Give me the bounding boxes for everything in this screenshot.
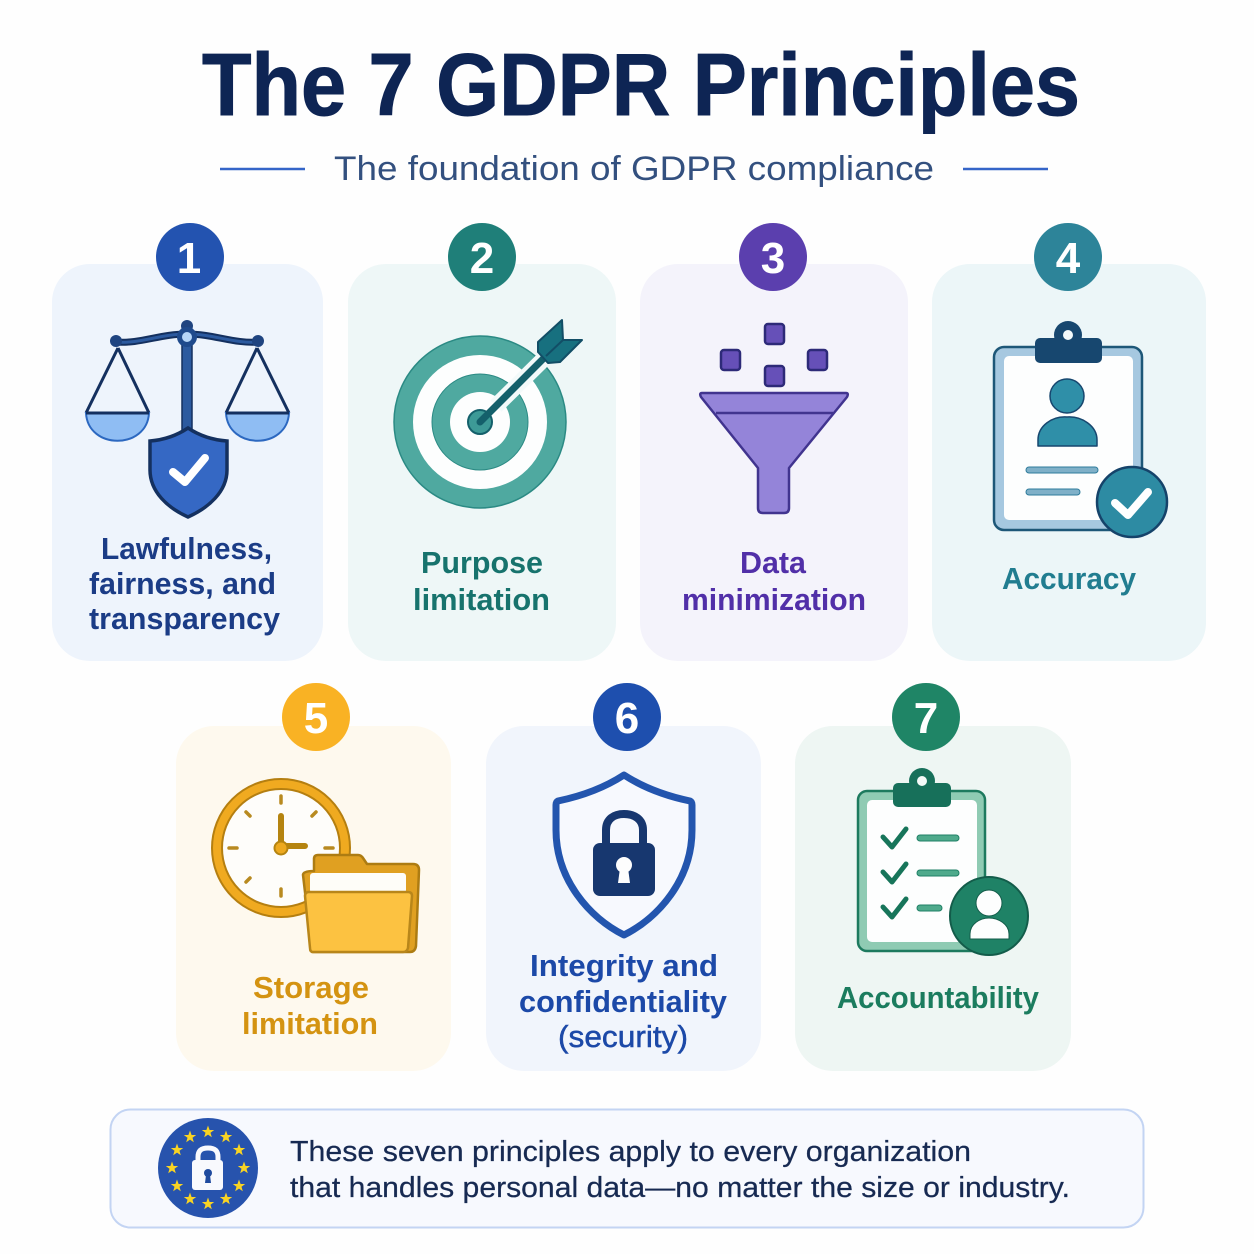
label: Purpose (421, 545, 543, 580)
panel: 5 storage limitation (176, 683, 451, 1071)
label: fairness, and (89, 566, 276, 601)
callout text: These seven principles apply to every organization (290, 1136, 971, 1168)
panel: 4 accuracy (932, 223, 1206, 661)
label: minimization (682, 582, 866, 617)
badge 1 (156, 223, 224, 291)
badge 7: 7 (914, 694, 938, 743)
icon: EU stars and padlock (158, 1118, 258, 1218)
label (89, 531, 281, 636)
badge 1: 1 (177, 234, 201, 283)
title: The 7 GDPR Principles (202, 35, 1080, 134)
label: limitation (413, 582, 550, 617)
badge 2 (448, 223, 516, 291)
badge 5 (282, 683, 350, 751)
label: confidentiality (519, 984, 728, 1019)
label: Data (740, 545, 807, 580)
label: (security) (558, 1019, 688, 1054)
badge 4: 4 (1056, 234, 1081, 283)
icon: funnel (700, 324, 848, 513)
icon: checklist with person (858, 768, 1028, 955)
badge 6 (593, 683, 661, 751)
panel: 2 purpose limitation (348, 223, 616, 661)
icon: target with arrow (394, 320, 582, 508)
badge 3 (739, 223, 807, 291)
label (519, 948, 728, 1054)
badge 7 (892, 683, 960, 751)
badge 4 (1034, 223, 1102, 291)
label: transparency (89, 601, 281, 636)
label: limitation (242, 1006, 378, 1041)
callout text (290, 1136, 1070, 1204)
badge 2: 2 (470, 234, 494, 283)
icon: clipboard with person and check (994, 321, 1167, 537)
subtitle: The foundation of GDPR compliance (334, 150, 934, 188)
label: Integrity and (530, 948, 718, 983)
panel: 1 lawfulness (52, 223, 323, 661)
label (413, 545, 550, 617)
panel: 3 data minimization (640, 223, 908, 661)
badge 3: 3 (761, 234, 785, 283)
panel: 6 integrity and confidentiality (486, 683, 761, 1071)
icon: scales with shield (86, 320, 289, 517)
callout text: that handles personal data—no matter the size or industry. (290, 1172, 1070, 1204)
label (242, 970, 378, 1041)
label (682, 545, 866, 617)
badge 5: 5 (304, 694, 328, 743)
icon: shield with lock (556, 775, 692, 935)
badge 6: 6 (615, 694, 639, 743)
icon: clock and folder (217, 784, 419, 952)
label: Accountability (837, 980, 1040, 1015)
label: Storage (253, 970, 369, 1005)
callout banner (110, 1110, 1144, 1228)
label: Lawfulness, (101, 531, 272, 566)
label: Accuracy (1002, 561, 1137, 596)
panel: 7 accountability (795, 683, 1071, 1071)
